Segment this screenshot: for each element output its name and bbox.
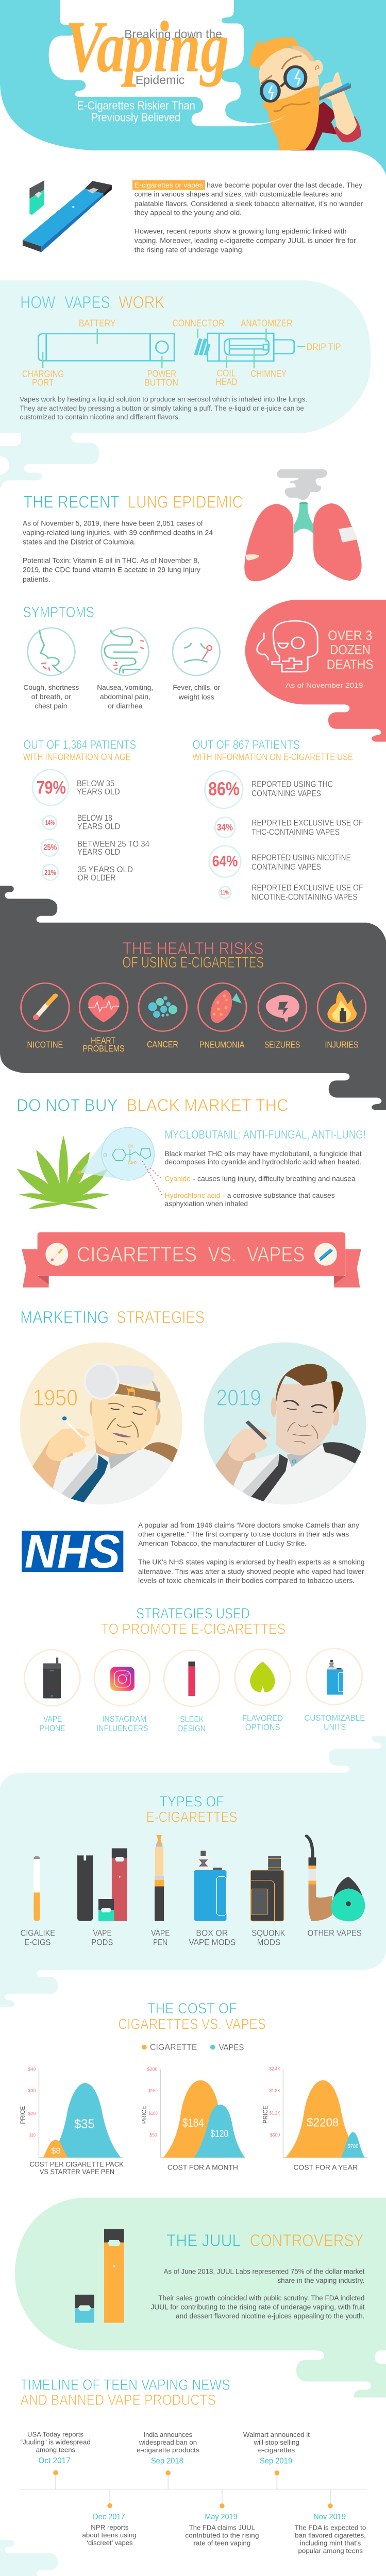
section: cost of cigarettes vs vapes xyxy=(20,2000,367,2176)
heading xyxy=(118,2000,266,2032)
stat numbers: age: 25% xyxy=(43,843,57,852)
device: box mod xyxy=(194,1851,226,1921)
chart: cost for a month: $200 xyxy=(147,2066,158,2072)
chart: cost for a year xyxy=(262,2066,367,2172)
heading: E-CIGARETTES xyxy=(146,1808,237,1825)
device labels: BOX OR xyxy=(196,1928,228,1938)
diagram labels: HEAD xyxy=(215,377,237,387)
event: Sep 2019: will stop selling xyxy=(254,2439,299,2447)
stat labels: age: BETWEEN 25 TO 34 xyxy=(77,839,149,849)
icon: pneumonia lung xyxy=(210,990,242,1023)
epidemic text: As of November 5, 2019, there have been 2,051 cases of xyxy=(23,520,203,528)
panel background xyxy=(0,2540,386,2576)
section: strategies used to promote e-cigarettes xyxy=(24,1605,365,1733)
stat labels: use xyxy=(251,779,363,902)
callout text: DOZEN xyxy=(330,643,371,657)
legend: CIGARETTE xyxy=(150,2042,197,2052)
stat circles: use xyxy=(205,771,243,899)
stat numbers: age: 79% xyxy=(37,778,66,798)
stat labels: age: BELOW 35 xyxy=(77,778,114,788)
atomizer drawing xyxy=(196,333,294,361)
device labels: VAPE MODS xyxy=(189,1937,236,1947)
stat numbers: age xyxy=(37,778,66,877)
diagram labels xyxy=(22,318,341,388)
stat numbers: use: 64% xyxy=(212,853,238,870)
stat labels: use: CONTAINING VAPES xyxy=(251,788,321,798)
chart: cost for a year: $2.4K xyxy=(270,2066,280,2072)
chart: cost for a month: $120 xyxy=(210,2129,228,2139)
chart: cost for a month: PRICE xyxy=(141,2106,148,2124)
heading: HOW xyxy=(20,293,56,312)
heading: MARKETING xyxy=(20,1308,109,1327)
strategy labels xyxy=(39,1713,365,1733)
myclobutanil text xyxy=(165,1128,366,1208)
controversy text: share in the vaping industry. xyxy=(277,2277,364,2285)
stat labels: use: CONTAINING VAPES xyxy=(251,862,321,872)
stat labels: age: YEARS OLD xyxy=(77,787,120,796)
heading xyxy=(166,2231,364,2250)
event: Nov 2019: popular among teens xyxy=(298,2548,363,2555)
battery drawing xyxy=(39,334,174,361)
epidemic text: 2019, the CDC found vitamin E acetate in 29 lung injury xyxy=(23,566,200,574)
chart: cost for a month: $50 xyxy=(149,2132,157,2138)
strategy labels: UNITS xyxy=(324,1722,346,1732)
event: May 2019 xyxy=(185,2512,259,2547)
heading: use: OUT OF 867 PATIENTS xyxy=(193,738,300,752)
heading: VAPES xyxy=(64,293,110,312)
stat numbers: age: 21% xyxy=(44,868,56,877)
chart: cost for a month xyxy=(141,2066,245,2172)
symptom: cough: Cough, shortness xyxy=(23,684,79,691)
legend: VAPES xyxy=(219,2042,244,2052)
heading: BLACK MARKET THC xyxy=(127,1096,289,1115)
device labels: OTHER VAPES xyxy=(308,1928,362,1938)
event: Oct 2017: among teens xyxy=(36,2447,75,2454)
heading: STRATEGIES xyxy=(116,1308,205,1327)
strategy labels: INFLUENCERS xyxy=(96,1723,148,1733)
heading xyxy=(101,1605,286,1637)
title: Breaking down the xyxy=(124,28,222,41)
event: Dec 2017: about teens using xyxy=(82,2532,137,2539)
device labels: E-CIGS xyxy=(24,1937,51,1947)
illustration: cannabis leaf with magnifier xyxy=(16,1127,162,1209)
device labels: SQUONK xyxy=(251,1928,286,1938)
diagram labels: CONNECTOR xyxy=(172,318,225,329)
risk labels: PROBLEMS xyxy=(83,1044,125,1054)
stat labels: use: REPORTED USING THC xyxy=(251,779,333,789)
icon: heart xyxy=(88,995,120,1023)
stat numbers: age: 14% xyxy=(45,819,55,826)
illustration: 1950 doctor xyxy=(20,1342,182,1505)
symptom: nausea: abdominal pain, xyxy=(100,693,150,701)
vape diagram xyxy=(20,318,341,421)
event: Oct 2017 xyxy=(21,2431,91,2465)
hero background xyxy=(0,0,386,175)
chart: cost for a year: $1.8K xyxy=(270,2088,280,2094)
symptom: cough: of breath, or xyxy=(31,693,71,701)
panel: vaping prevalence xyxy=(0,2540,386,2576)
panel: patients by e-cigarette use xyxy=(193,738,363,902)
chart: cost for a year: $780 xyxy=(347,2144,359,2149)
chart: pack vs starter pen: $40 xyxy=(28,2066,36,2072)
stat circles: age xyxy=(32,770,69,880)
illustration: JUUL and pod xyxy=(75,2229,124,2323)
title xyxy=(65,6,229,88)
heading: LUNG EPIDEMIC xyxy=(128,493,243,512)
diagram labels: PORT xyxy=(32,378,54,388)
event: Oct 2017: Oct 2017 xyxy=(39,2455,71,2465)
stat numbers: use: 34% xyxy=(217,823,233,833)
chart: cost for a year: $1.2K xyxy=(270,2111,280,2116)
risk labels: PNEUMONIA xyxy=(199,1040,244,1050)
risk labels xyxy=(27,1036,359,1054)
icon: cigarette xyxy=(33,995,55,1020)
callout: over 3 dozen deaths xyxy=(245,600,386,742)
diagram labels: CHIMNEY xyxy=(250,369,287,379)
epidemic text: vaping-related lung injuries, with 39 confirmed deaths in 24 xyxy=(23,529,213,537)
panel background xyxy=(0,280,371,433)
section: symptoms and deaths xyxy=(23,600,386,902)
explanation text: Vapes work by heating a liquid solution to produce an aerosol which is inhaled into the lungs. xyxy=(20,396,307,403)
chart: pack vs starter pen xyxy=(20,2066,124,2176)
chart: pack vs starter pen: $20 xyxy=(28,2111,36,2116)
exhaled smoke tail xyxy=(244,116,285,126)
panel: patients by age xyxy=(23,738,149,883)
illustration: JUUL device and pod xyxy=(23,180,112,252)
heading: age: OUT OF 1,364 PATIENTS xyxy=(23,738,136,752)
chart: pack vs starter pen: $10 xyxy=(29,2132,36,2138)
strategy labels: PHONE xyxy=(39,1723,65,1733)
icon: mint leaf xyxy=(250,1662,275,1692)
chart: pack vs starter pen: PRICE xyxy=(20,2106,26,2124)
intro text: E-cigarettes or vapes xyxy=(135,181,203,189)
heading xyxy=(20,293,165,312)
device: other vapes xyxy=(307,1836,365,1921)
heading xyxy=(16,1096,289,1115)
device labels: MODS xyxy=(257,1937,280,1947)
stat labels: age: 35 YEARS OLD xyxy=(77,865,133,874)
heading xyxy=(122,939,264,971)
event: Sep 2018: e-cigarette products xyxy=(137,2447,199,2454)
event: Oct 2017: “Juuling” is widespread xyxy=(21,2439,91,2446)
explanation text: customized to contain nicotine and different flavors. xyxy=(20,413,180,421)
icon: vape badge xyxy=(314,1243,337,1266)
myclobutanil text: Cyanide xyxy=(165,1175,191,1183)
banner title: CIGARETTES xyxy=(77,1243,197,1266)
title: Epidemic xyxy=(136,74,185,87)
heading: TIMELINE OF TEEN VAPING NEWS xyxy=(20,2376,230,2393)
event: Nov 2019 xyxy=(295,2512,366,2555)
event: May 2019: contributed to the rising xyxy=(185,2532,259,2539)
event: Sep 2018: India announces xyxy=(143,2431,192,2438)
symptom: cough: chest pain xyxy=(35,702,67,710)
strategy circles xyxy=(24,1649,362,1706)
chart: cost for a month: $100 xyxy=(149,2111,158,2116)
heading xyxy=(23,493,243,512)
heading: use xyxy=(193,738,353,762)
symptom: fever xyxy=(173,628,220,701)
device labels: PODS xyxy=(91,1937,113,1947)
illustration: 2019 doctor: 2019 xyxy=(216,1385,261,1411)
heading: THE JUUL xyxy=(166,2231,241,2250)
event: Oct 2017: USA Today reports xyxy=(27,2431,83,2438)
stat numbers: use: 11% xyxy=(221,889,229,896)
chart: cost for a year: PRICE xyxy=(262,2106,269,2124)
intro text: they appeal to the young and old. xyxy=(135,209,242,217)
callout text xyxy=(286,628,374,690)
icon: instagram xyxy=(110,1667,135,1691)
panel: health risks xyxy=(0,886,386,1110)
diagram labels: CHARGING xyxy=(22,369,64,379)
banner: cigarettes vs. vapes xyxy=(22,1232,361,1287)
event: Sep 2019: e-cigarettes xyxy=(258,2447,295,2454)
chart: cost for a month: COST FOR A MONTH xyxy=(167,2164,238,2172)
strategy labels: FLAVORED xyxy=(242,1713,283,1723)
chart: pack vs starter pen: $8 xyxy=(51,2146,61,2155)
heading: CIGARETTES VS. VAPES xyxy=(118,2015,266,2032)
diagram labels: BATTERY xyxy=(79,318,116,329)
symptom: fever: weight loss xyxy=(178,693,214,701)
heading: DO NOT BUY xyxy=(16,1096,118,1115)
icon: skull with cigarette xyxy=(257,621,317,672)
heading: symptoms: SYMPTOMS xyxy=(23,604,94,620)
icon: vape phone xyxy=(43,1657,61,1699)
device labels xyxy=(21,1928,362,1947)
risk labels: HEART xyxy=(91,1036,115,1046)
banner title: VS. xyxy=(208,1243,237,1266)
event: Dec 2017: NPR reports xyxy=(91,2524,128,2531)
marketing text: American Tobacco, the manufacturer of Lucky Strike. xyxy=(138,1540,307,1548)
heading: THE RECENT xyxy=(23,493,120,512)
epidemic text: states and the District of Columbia. xyxy=(23,538,136,546)
panel background xyxy=(0,1736,386,2007)
event: Sep 2018 xyxy=(137,2431,199,2465)
epidemic text: Potential Toxin: Vitamin E oil in THC. As of November 8, xyxy=(23,557,199,565)
panel background xyxy=(15,2198,386,2398)
title: Vaping xyxy=(65,6,229,88)
device: vape pods xyxy=(77,1849,127,1921)
heading: THE COST OF xyxy=(147,2000,237,2017)
symptom: cough xyxy=(23,628,79,710)
illustration: cannabis leaf with magnifier: C4H9 xyxy=(128,1161,137,1165)
symptom: nausea: or diarrhea xyxy=(108,702,143,710)
epidemic text xyxy=(23,520,213,583)
chart: cost for a year: $600 xyxy=(270,2132,280,2138)
stat labels: age xyxy=(77,778,149,883)
heading: age xyxy=(23,738,136,762)
section: timeline xyxy=(19,2376,367,2555)
icon: sleek device xyxy=(188,1662,195,1696)
risk circles xyxy=(21,983,366,1031)
device: vape pen xyxy=(155,1835,164,1921)
heading xyxy=(146,1793,237,1825)
stat labels: age: YEARS OLD xyxy=(77,847,120,857)
panel: types of e-cigarettes xyxy=(0,1736,386,2007)
heading: AND BANNED VAPE PRODUCTS xyxy=(21,2392,216,2409)
event: Dec 2017 xyxy=(82,2512,137,2547)
smoke shape xyxy=(0,433,99,489)
risk labels: CANCER xyxy=(147,1040,178,1050)
device labels: VAPE xyxy=(93,1928,112,1938)
diagram pointer lines xyxy=(43,329,305,368)
chart: cost for a month: $150 xyxy=(149,2088,158,2094)
intro text: come in various shapes and sizes, with customizable features and xyxy=(135,191,343,198)
event: May 2019: The FDA claims JUUL xyxy=(189,2524,255,2532)
icon: custom box mod xyxy=(327,1660,343,1694)
strategy labels: VAPE xyxy=(43,1714,62,1724)
panel: the JUUL controversy xyxy=(15,2198,386,2398)
section: do not buy black market THC xyxy=(16,1096,366,1287)
heading: THE HEALTH RISKS xyxy=(123,939,264,958)
diagram labels: DRIP TIP xyxy=(307,342,341,352)
strategy labels: CUSTOMIZABLE xyxy=(304,1713,365,1723)
molecule xyxy=(112,1149,150,1161)
icon: cigarette badge xyxy=(45,1243,68,1266)
strategy labels: DESIGN xyxy=(178,1723,206,1733)
stat numbers: use: 86% xyxy=(208,778,240,800)
event: Nov 2019: The FDA is expected to xyxy=(295,2524,366,2532)
illustration: cannabis leaf with magnifier: Cl xyxy=(104,1153,107,1157)
explanation text xyxy=(20,396,307,421)
diagram labels: BUTTON xyxy=(144,378,178,388)
dark background xyxy=(0,886,386,1110)
intro text: However, recent reports show a growing lung epidemic linked with xyxy=(135,228,347,235)
smoke cloud behind title xyxy=(49,0,246,126)
chart: cost for a year: COST FOR A YEAR xyxy=(293,2164,358,2172)
icon: cancer cells xyxy=(148,996,177,1018)
subtitle: E-Cigarettes Riskier Than xyxy=(77,99,195,112)
risk labels: SEIZURES xyxy=(264,1040,300,1050)
event: May 2019: May 2019 xyxy=(205,2512,237,2521)
icon: burning vape xyxy=(327,991,357,1024)
heading xyxy=(20,2376,230,2409)
stat labels: age: BELOW 18 xyxy=(77,813,112,823)
symptom: nausea xyxy=(97,628,153,710)
device labels: CIGALIKE xyxy=(21,1928,55,1938)
heading xyxy=(20,1308,205,1327)
intro section xyxy=(23,180,363,254)
callout text: OVER 3 xyxy=(328,628,372,643)
heading: TO PROMOTE E-CIGARETTES xyxy=(101,1620,286,1637)
callout text: As of November 2019 xyxy=(286,682,363,690)
explanation text: They are activated by pressing a button or simply taking a puff. The e-liquid or e-juice can be xyxy=(20,404,304,412)
marketing text xyxy=(138,1521,364,1585)
risk labels: NICOTINE xyxy=(27,1040,63,1050)
event: Dec 2017: Dec 2017 xyxy=(93,2512,125,2521)
diagram labels: ANATOMIZER xyxy=(241,318,292,329)
device labels: VAPE xyxy=(151,1928,170,1938)
chart: cost for a year: $2208 xyxy=(307,2116,339,2129)
illustration: 2019 doctor xyxy=(204,1342,366,1505)
stat labels: age: YEARS OLD xyxy=(77,821,120,831)
stat labels: use: THC-CONTAINING VAPES xyxy=(251,827,340,837)
intro text: the rising rate of underage vaping. xyxy=(135,246,244,254)
symptom: nausea: Nausea, vomiting, xyxy=(97,684,153,691)
event: Sep 2019 xyxy=(243,2431,310,2465)
chart: pack vs starter pen: COST PER CIGARETTE PACK xyxy=(29,2161,124,2168)
myclobutanil text: Hydrochloric acid xyxy=(165,1192,221,1200)
legend xyxy=(142,2042,244,2052)
strategy labels: OPTIONS xyxy=(245,1722,280,1732)
stat labels: age: OR OLDER xyxy=(77,873,116,883)
epidemic text: patients. xyxy=(23,575,50,583)
event: Sep 2018: Sep 2018 xyxy=(151,2456,183,2465)
logo: NHS: NHS xyxy=(25,1524,120,1578)
event: Sep 2019: Sep 2019 xyxy=(260,2456,292,2465)
strategy labels: SLEEK xyxy=(180,1714,204,1724)
controversy text xyxy=(150,2268,365,2320)
section: the recent lung epidemic xyxy=(0,433,362,583)
illustration: cannabis leaf with magnifier: CN xyxy=(128,1144,133,1149)
event: Nov 2019: Nov 2019 xyxy=(313,2512,346,2521)
event: May 2019: rate of teen vaping xyxy=(193,2540,250,2547)
intro text xyxy=(132,180,363,254)
stat numbers: use xyxy=(208,778,240,896)
chart: pack vs starter pen: VS STARTER VAPE PEN xyxy=(40,2168,114,2176)
panel: how vapes work xyxy=(0,280,371,433)
strategy labels: INSTAGRAM xyxy=(102,1714,146,1724)
event: Nov 2019: ban flavored cigarettes, xyxy=(295,2532,366,2539)
heading: STRATEGIES USED xyxy=(136,1605,250,1622)
device: cigalike xyxy=(33,1856,40,1921)
heading: age: WITH INFORMATION ON AGE xyxy=(23,752,131,762)
event: Sep 2018: widespread ban on xyxy=(139,2439,197,2447)
subtitle: Previously Believed xyxy=(91,111,180,124)
device labels: PEN xyxy=(153,1937,167,1947)
illustration: smoky lungs xyxy=(244,469,362,581)
illustration: 1950 doctor: 1950 xyxy=(33,1385,78,1411)
heading: TYPES OF xyxy=(160,1793,224,1810)
hero banner xyxy=(0,0,386,175)
event: Dec 2017: ‘discreet’ vapes xyxy=(87,2539,132,2547)
illustration: bearded man vaping xyxy=(249,37,361,150)
myclobutanil text: asphyxiation when inhaled xyxy=(165,1200,248,1208)
diagram labels: POWER xyxy=(147,369,176,379)
heading: WORK xyxy=(119,293,165,312)
event: Nov 2019: including mint that's xyxy=(300,2540,361,2547)
heading: OF USING E-CIGARETTES xyxy=(122,954,264,971)
subtitle xyxy=(77,99,195,124)
banner title: VAPES xyxy=(247,1243,305,1266)
timeline axis xyxy=(19,2470,367,2509)
device: squonk mod xyxy=(250,1856,284,1921)
risk labels: INJURIES xyxy=(325,1040,359,1050)
section: marketing strategies xyxy=(20,1308,366,1585)
symptom: fever: Fever, chills, or xyxy=(173,684,220,692)
diagram labels: COIL xyxy=(216,368,236,379)
chart: cost for a month: $184 xyxy=(182,2116,204,2129)
myclobutanil text: - causes lung injury, difficulty breathing and nausea xyxy=(193,1175,356,1183)
event: Sep 2019: Walmart announced it xyxy=(243,2431,310,2438)
icon: brain with bolt xyxy=(266,995,299,1022)
chart: pack vs starter pen: $35 xyxy=(74,2117,94,2131)
myclobutanil text: - a corrosive substance that causes xyxy=(223,1192,335,1200)
chart: pack vs starter pen: $30 xyxy=(28,2088,36,2094)
